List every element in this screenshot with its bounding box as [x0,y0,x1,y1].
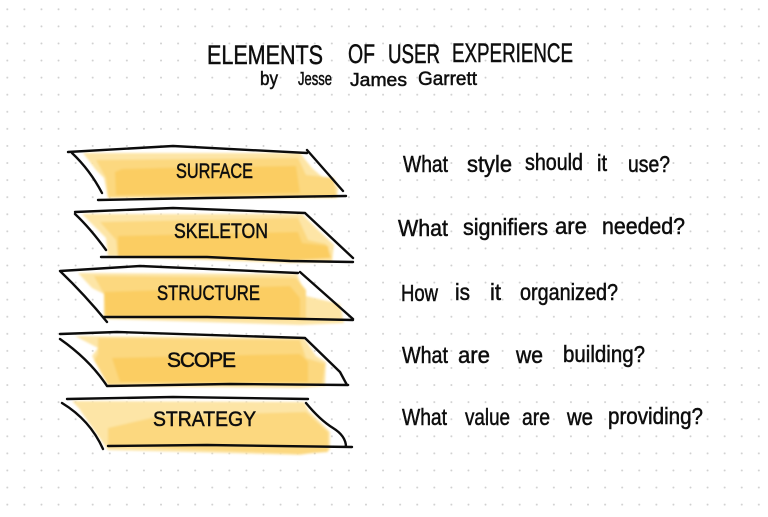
highlight: strategy [72,401,330,455]
subtitle: Jesse [298,69,332,89]
title [207,38,573,70]
label: skeleton: SKELETON [174,220,268,243]
question: surface: it [597,150,608,176]
subtitle: by [260,69,278,90]
layer: structure [60,266,353,325]
question: skeleton: What [398,215,449,241]
subtitle: Garrett [418,69,478,90]
label: surface: SURFACE [176,160,253,183]
question: surface: style [467,151,512,177]
layer: scope [60,332,348,388]
label: structure: STRUCTURE [157,282,260,305]
title: USER [388,39,440,69]
question: scope: building? [563,341,645,367]
subtitle: James [350,70,407,90]
question: surface: What [403,151,449,177]
highlight: structure [78,273,344,325]
title: OF [348,39,375,69]
question: strategy: are [522,404,550,430]
question: skeleton: signifiers [463,214,548,240]
question: structure: How [401,280,438,306]
question: scope: are [458,342,490,368]
question: strategy: we [566,404,593,430]
question: surface [403,149,670,177]
question: structure: it [490,279,502,305]
highlight: skeleton [82,214,334,263]
label: strategy: STRATEGY [153,408,256,431]
question: strategy [402,403,703,430]
question: strategy: What [402,404,448,430]
title: EXPERIENCE [452,38,573,68]
question: skeleton: needed? [602,213,685,239]
layer: strategy [62,397,352,455]
outline: structure [60,266,353,322]
question: structure: is [455,279,470,305]
label: scope: SCOPE [167,349,236,372]
question: structure [401,279,618,306]
layer: surface [68,146,346,200]
question: strategy: providing? [608,403,703,429]
highlight: surface [83,153,338,198]
question: strategy: value [465,404,510,430]
question: skeleton [398,213,685,241]
outline: strategy [62,397,352,449]
layer: skeleton [75,208,353,263]
outline: scope [60,332,348,386]
question: scope: What [402,342,449,368]
question: structure: organized? [520,279,618,305]
question: scope: we [515,342,543,368]
question: surface: use? [628,151,670,177]
question: skeleton: are [555,213,587,239]
question: surface: should [525,149,583,175]
subtitle [260,69,478,90]
title: ELEMENTS [207,40,323,70]
outline: surface [68,146,346,200]
highlight: scope [75,336,326,388]
outline: skeleton [75,208,353,262]
question: scope [402,341,645,368]
